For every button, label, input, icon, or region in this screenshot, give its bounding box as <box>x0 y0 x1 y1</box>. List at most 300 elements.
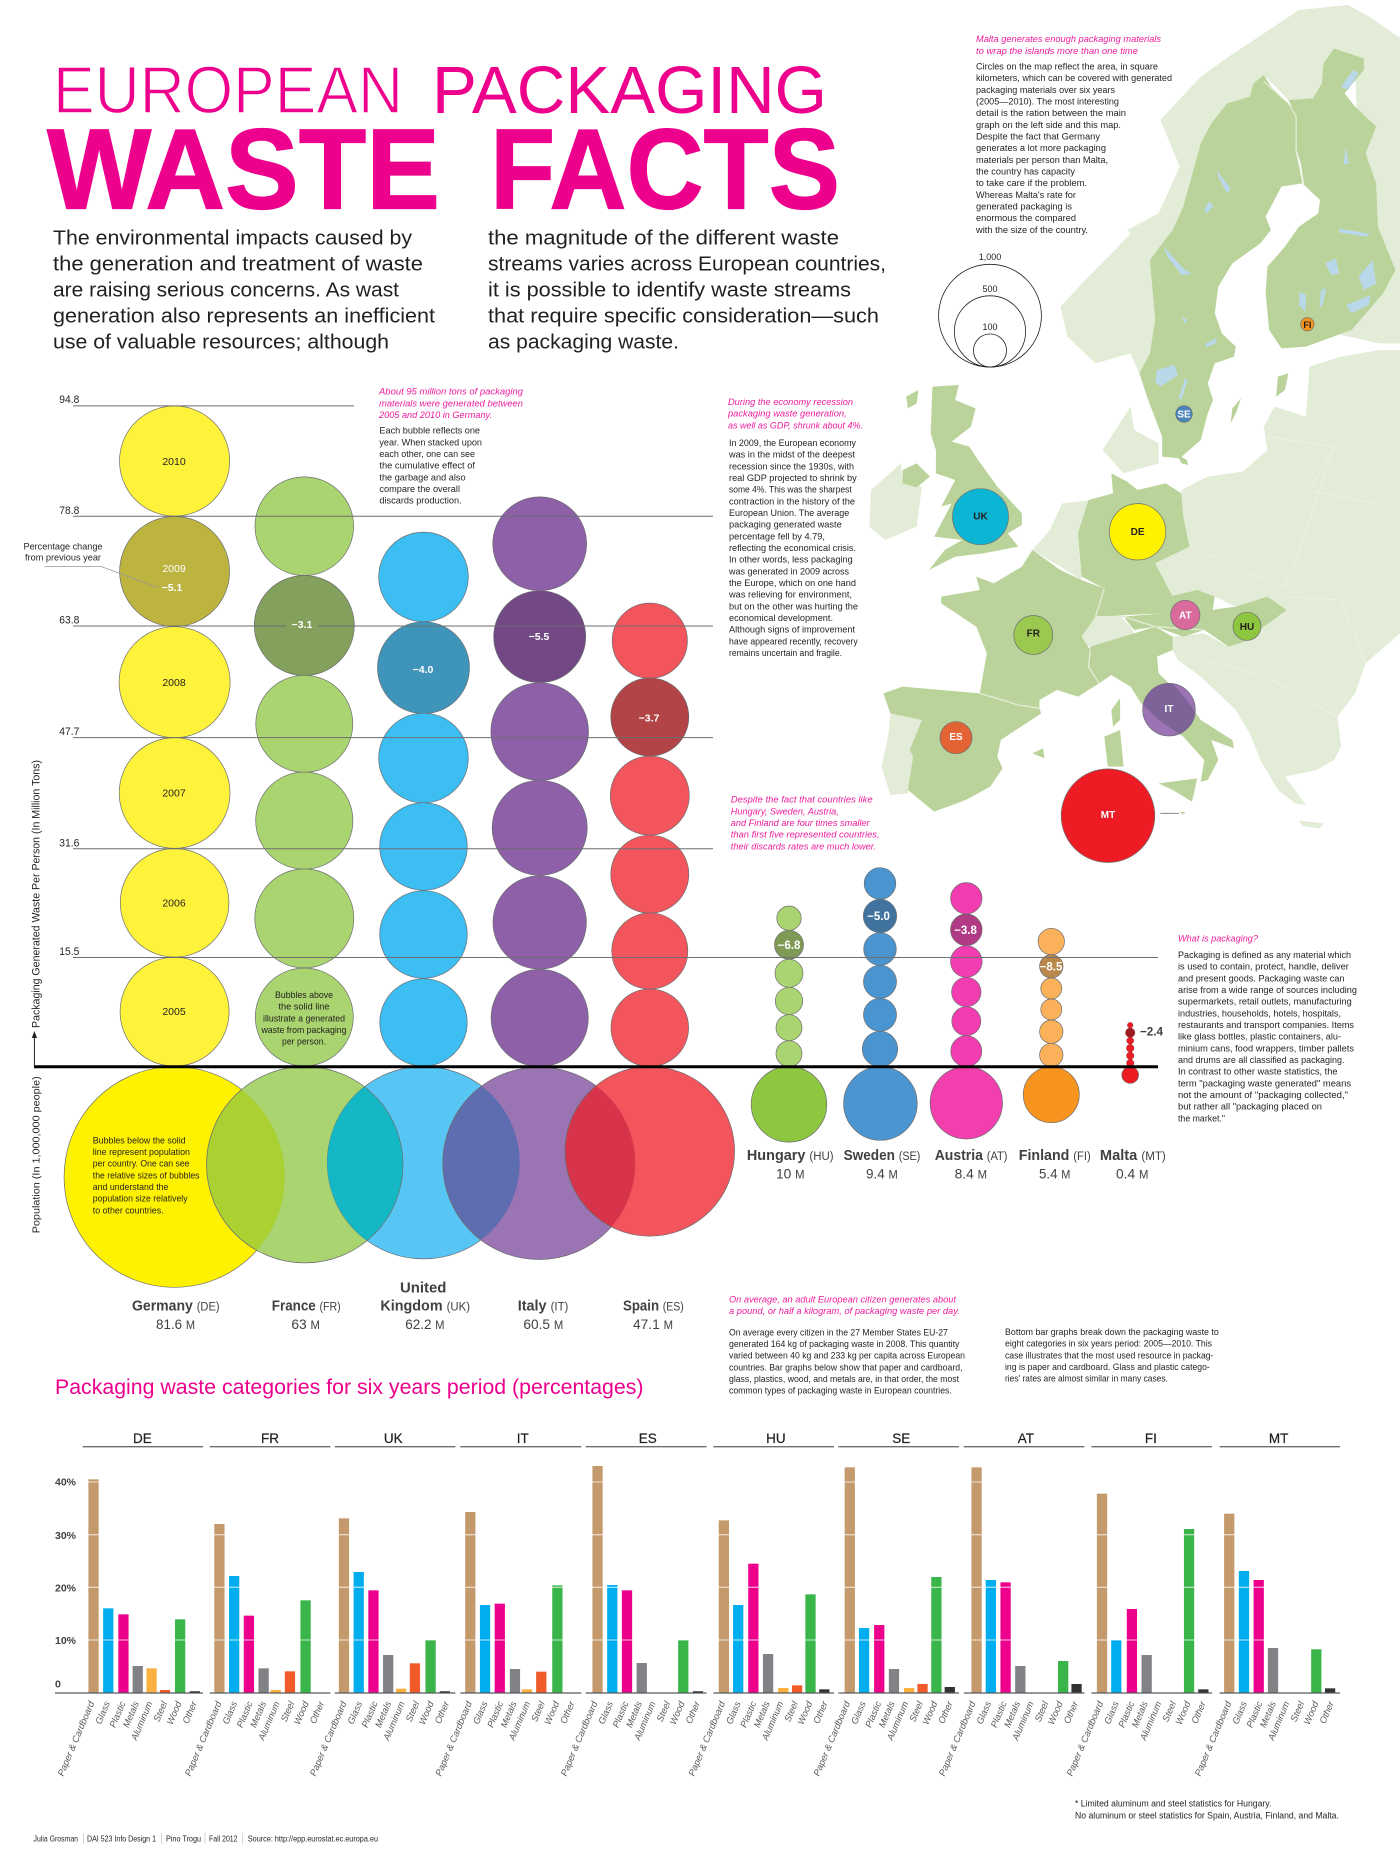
category labels: FI: Glass <box>1102 1700 1121 1726</box>
category labels: FI <box>1065 1699 1208 1778</box>
note: bubbles below line: Bubbles below the solid <box>93 1135 186 1146</box>
category labels: HU: Paper & Cardboard <box>687 1699 727 1778</box>
category labels: UK: Steel <box>404 1699 422 1723</box>
note: bubbles below line: to other countries. <box>93 1205 164 1216</box>
category labels: ES <box>559 1699 702 1778</box>
category labels: HU: Aluminum <box>760 1700 785 1743</box>
category labels: FR: Glass <box>221 1700 239 1726</box>
category labels: IT: Other <box>558 1699 577 1725</box>
callout: what is packaging: and drums are all classified as packaging. <box>1178 1055 1344 1066</box>
bubbles: Finland waste per year <box>1038 928 1065 1067</box>
callout: Malta: graph on the left side and this map. <box>976 120 1121 131</box>
callout: smaller countries: their discards rates are much lower. <box>731 841 876 852</box>
category labels: UK: Aluminum <box>381 1700 407 1743</box>
intro text: column 2: as packaging waste. <box>488 330 679 353</box>
callout: what is packaging: industries, households, hotels, hospitals, <box>1178 1008 1341 1019</box>
country labels: large: Italy (IT) <box>518 1299 569 1315</box>
category labels: UK: Glass <box>346 1700 364 1726</box>
year labels: Germany: 2008 <box>162 677 186 689</box>
category labels: HU: Plastic <box>738 1700 758 1729</box>
callout: Malta: kilometers, which can be covered with generated <box>976 73 1172 84</box>
callout: what is packaging: not the amount of "packaging collected," <box>1178 1090 1348 1101</box>
scale tick labels <box>59 394 79 958</box>
change labels: small countries <box>778 911 1163 1039</box>
text: bottom bar graphs explanation: ries' rates are almost similar in many cases. <box>1005 1374 1168 1385</box>
text: bottom bar graphs explanation <box>1005 1327 1219 1385</box>
callout: Malta: generated packaging is <box>976 202 1072 212</box>
country labels: large: 81.6 M <box>156 1316 195 1332</box>
callout: Malta: the country has capacity <box>976 166 1075 178</box>
country labels: small: 9.4 M <box>866 1165 898 1181</box>
note: bubbles below line: per country. One can see <box>93 1159 190 1170</box>
category labels: AT: Other <box>1062 1699 1080 1725</box>
category labels: MT: Metals <box>1258 1700 1278 1729</box>
callout: Germany 95 million: About 95 million tons of packaging <box>378 387 524 398</box>
title: FACTS <box>490 106 840 234</box>
callout: adult European citizen: varied between 40 kg and 233 kg per capita across European <box>729 1351 965 1362</box>
footnote <box>1075 1799 1339 1821</box>
callout: Malta: Circles on the map reflect the area, in square <box>976 62 1158 72</box>
category labels: SE: Wood <box>921 1699 940 1726</box>
callout: adult European citizen: generated 164 kg of packaging waste in 2008. This quantity <box>729 1339 960 1350</box>
map circle: ES: ES <box>949 732 963 743</box>
callout: Germany 95 million <box>378 387 524 507</box>
country labels: small: 5.4 M <box>1039 1165 1070 1181</box>
bar chart axis labels: 10% <box>55 1635 77 1647</box>
callout: recession: packaging waste generation, <box>727 409 847 420</box>
bar chart axis labels: 40% <box>55 1477 77 1489</box>
map circle: SE <box>1176 406 1192 422</box>
country column headers: UK <box>384 1431 403 1446</box>
note: bubbles below line <box>93 1135 200 1216</box>
category labels: AT: Glass <box>975 1700 993 1726</box>
country labels: large <box>132 1280 684 1332</box>
category labels: AT: Wood <box>1046 1699 1065 1726</box>
y axis label: waste: Packaging Generated Waste Per Person (In Million Tons) <box>30 760 42 1028</box>
category labels: FR: Wood <box>292 1699 311 1726</box>
year labels: Germany: 2005 <box>162 1006 186 1018</box>
bubbles: Malta waste per year <box>1126 1022 1135 1067</box>
category labels: ES: Other <box>684 1699 702 1725</box>
note: bubbles above line: the solid line <box>278 1002 330 1012</box>
callout: adult European citizen: a pound, or half a kilogram, of packaging waste per day. <box>729 1306 960 1317</box>
category labels: FI: Steel <box>1161 1699 1178 1723</box>
change labels: small countries: −2.4 <box>1140 1025 1163 1039</box>
change labels: large countries: −3.1 <box>292 619 313 631</box>
category labels: SE: Plastic <box>863 1700 883 1729</box>
category labels: AT: Paper & Cardboard <box>937 1699 978 1778</box>
country labels: small: 8.4 M <box>955 1165 987 1181</box>
category labels: HU: Glass <box>724 1700 743 1726</box>
callout: Malta: Whereas Malta's rate for <box>976 190 1077 201</box>
heading: bar charts: Packaging waste categories for six years period (percentages) <box>55 1376 644 1399</box>
bubbles: France waste per year <box>254 477 354 1066</box>
country labels: small: Malta (MT) <box>1100 1148 1166 1164</box>
solid baseline <box>34 1065 1158 1068</box>
callout: recession: as well as GDP, shrunk about 4%. <box>728 420 863 431</box>
y axis label: population: Population (In 1,000,000 people) <box>32 1076 42 1233</box>
callout: Malta: with the size of the country. <box>975 225 1088 236</box>
callout: Malta: to wrap the islands more than one time <box>976 46 1138 57</box>
country labels: small: Hungary (HU) <box>747 1148 834 1164</box>
callout: Germany 95 million: each other, one can see <box>379 449 475 460</box>
callout: Malta: enormous the compared <box>976 213 1076 224</box>
text: bottom bar graphs explanation: eight categories in six years period: 2005—2010. This <box>1005 1339 1212 1350</box>
category labels: DE: Glass <box>93 1700 112 1726</box>
bar chart axis labels: 30% <box>55 1530 77 1542</box>
category labels: MT: Paper & Cardboard <box>1193 1699 1234 1778</box>
country labels: large: 60.5 M <box>523 1316 563 1332</box>
bar chart: IT <box>465 1512 563 1693</box>
country labels: large: Kingdom (UK) <box>380 1299 470 1315</box>
category labels: IT: Metals <box>499 1700 519 1729</box>
callout: what is packaging: and present goods. Packaging waste can <box>1178 973 1344 984</box>
bubbles: UK waste per year <box>378 532 470 1066</box>
category labels: SE: Glass <box>849 1700 868 1726</box>
callout: adult European citizen: common types of packaging waste in European countries. <box>729 1386 952 1397</box>
category labels: DE: Metals <box>121 1700 141 1729</box>
map circle: DE <box>1109 504 1166 560</box>
title <box>47 53 840 234</box>
category labels: DE <box>56 1699 199 1778</box>
category labels: MT <box>1193 1699 1336 1778</box>
country column headers <box>83 1431 1340 1447</box>
country column headers: FI <box>1145 1431 1157 1446</box>
category labels: MT: Aluminum <box>1266 1700 1292 1743</box>
callout: what is packaging: arise from a wide range of sources including <box>1178 985 1357 996</box>
size legend circles <box>939 252 1041 367</box>
callout: smaller countries: Despite the fact that countries like <box>731 795 873 806</box>
callout: what is packaging <box>1178 934 1357 1124</box>
callout: what is packaging: term "packaging waste generated" means <box>1178 1078 1351 1089</box>
note: bubbles below line: population size relatively <box>93 1194 188 1205</box>
map circle: UK: UK <box>973 512 988 522</box>
footer credits: Julia Grosman <box>34 1834 78 1844</box>
callout: recession <box>727 397 863 659</box>
callout: recession: In 2009, the European economy <box>729 438 856 449</box>
country labels: small: 10 M <box>776 1165 805 1181</box>
intro text: column 2: it is possible to identify waste streams <box>488 278 851 301</box>
callout: Malta: to take care if the problem. <box>976 178 1087 189</box>
intro text: column 1 <box>53 226 435 353</box>
category labels: DE: Plastic <box>108 1700 128 1729</box>
category labels: IT <box>434 1699 577 1778</box>
callout: adult European citizen <box>729 1294 965 1397</box>
category labels: ES: Metals <box>624 1700 644 1729</box>
country labels: large: 63 M <box>291 1316 320 1332</box>
callout: what is packaging: minium cans, food wrappers, timber pallets <box>1178 1043 1354 1054</box>
map circle: IT: IT <box>1165 704 1173 715</box>
intro text: column 1: use of valuable resources; although <box>53 330 389 353</box>
callout: recession: In other words, less packaging <box>729 555 853 566</box>
category labels: UK: Plastic <box>360 1700 380 1729</box>
category labels: DE: Paper & Cardboard <box>56 1699 97 1778</box>
footer credits: Source: http://epp.eurostat.ec.europa.eu <box>248 1834 378 1844</box>
category labels: AT <box>937 1699 1080 1778</box>
category labels: FI: Other <box>1190 1699 1208 1725</box>
category labels: SE: Aluminum <box>885 1700 910 1743</box>
note: bubbles below line: line represent population <box>93 1147 190 1158</box>
text: bottom bar graphs explanation: Bottom bar graphs break down the packaging waste to <box>1005 1327 1219 1338</box>
category labels: ES: Aluminum <box>632 1700 658 1743</box>
intro text: column 2: streams varies across European countries, <box>488 252 886 275</box>
change labels: small countries: −3.8 <box>954 925 977 937</box>
bubbles: Germany waste per year <box>119 406 230 1066</box>
callout: Malta: Despite the fact that Germany <box>976 132 1100 142</box>
callout: recession: was in the midst of the deepest <box>728 450 855 461</box>
country labels: small: Sweden (SE) <box>844 1148 920 1164</box>
change labels: small countries: −8.5 <box>1040 962 1063 974</box>
note: percentage change: from previous year <box>25 552 101 562</box>
bar chart axis labels: 0 <box>55 1679 61 1691</box>
callout: what is packaging: What is packaging? <box>1178 934 1259 945</box>
category labels: SE: Other <box>936 1699 955 1725</box>
country labels: small: 0.4 M <box>1116 1165 1148 1181</box>
year labels: Germany: 2010 <box>162 456 186 468</box>
change labels: large countries <box>292 619 660 724</box>
text: bottom bar graphs explanation: ing is paper and cardboard. Glass and plastic catego- <box>1005 1362 1210 1373</box>
category labels: SE <box>812 1699 955 1778</box>
note: bubbles below line: and understand the <box>93 1182 168 1193</box>
footnote: * Limited aluminum and steel statistics for Hungary. <box>1075 1799 1271 1810</box>
callout: Germany 95 million: Each bubble reflects one <box>379 426 480 437</box>
footer credits: Pino Trogu <box>166 1834 201 1844</box>
category labels: IT: Aluminum <box>506 1700 532 1743</box>
bar chart: UK <box>339 1518 450 1693</box>
bubbles: Hungary waste per year <box>774 906 804 1067</box>
bar chart: FI <box>1097 1494 1208 1693</box>
year labels: Germany: 2007 <box>162 788 186 800</box>
category labels: FI: Metals <box>1130 1700 1150 1729</box>
note: bubbles above line: waste from packaging <box>261 1025 346 1035</box>
note: bubbles above line: per person. <box>282 1036 326 1046</box>
callout: recession: During the economy recession <box>728 397 853 408</box>
bar chart: HU <box>719 1520 829 1693</box>
callout: Germany 95 million: the cumulative effect of <box>379 461 475 472</box>
callout: recession: economical development. <box>729 613 833 624</box>
callout: Germany 95 million: the garbage and also <box>379 472 466 483</box>
category labels: IT: Glass <box>471 1700 490 1726</box>
callout: recession: Although signs of improvement <box>729 625 855 636</box>
bar chart axis labels: 20% <box>55 1583 77 1595</box>
change labels: large countries: −5.5 <box>529 631 550 643</box>
country labels: large: 62.2 M <box>405 1316 444 1332</box>
size legend circles: 1,000 <box>979 252 1001 262</box>
callout: smaller countries: Hungary, Sweden, Austria, <box>731 806 839 817</box>
size legend circles: 100 <box>982 322 998 332</box>
callout: adult European citizen: On average every citizen in the 27 Member States EU-27 <box>729 1327 948 1338</box>
map circle: FI <box>1301 318 1314 331</box>
intro text: column 1: are raising serious concerns. As wast <box>53 278 399 301</box>
map circle: HU <box>1233 612 1261 640</box>
country labels: large: Germany (DE) <box>132 1299 220 1315</box>
category labels: UK: Wood <box>417 1699 436 1726</box>
callout: what is packaging: In contrast to other waste statistics, the <box>1178 1067 1338 1078</box>
scale tick labels: 15.5 <box>59 946 79 958</box>
population bubbles: large countries <box>64 1066 735 1287</box>
category labels: FI: Aluminum <box>1138 1700 1164 1743</box>
category labels: MT: Other <box>1318 1699 1336 1725</box>
scale tick labels: 63.8 <box>59 614 79 626</box>
map circle: FI: FI <box>1303 320 1311 330</box>
category labels: ES: Glass <box>597 1700 615 1726</box>
size legend circles: 500 <box>982 284 998 294</box>
scale tick labels: 94.8 <box>59 394 79 406</box>
country column headers: MT <box>1269 1431 1288 1446</box>
callout: recession: have appeared recently, recovery <box>729 636 858 647</box>
year labels: Germany: 2006 <box>162 898 186 910</box>
category labels: FI: Paper & Cardboard <box>1065 1699 1106 1778</box>
intro text: column 1: generation also represents an inefficient <box>53 304 435 327</box>
country labels: small <box>747 1148 1166 1181</box>
map circle: AT: AT <box>1179 610 1192 622</box>
category labels: DE: Steel <box>152 1699 170 1723</box>
category labels: FR: Plastic <box>235 1700 255 1729</box>
callout: recession: reflecting the economical crisis. <box>729 543 856 554</box>
category labels: SE: Metals <box>877 1700 897 1729</box>
category labels: HU: Steel <box>782 1699 800 1723</box>
category labels: FR: Steel <box>279 1699 297 1723</box>
map circle: ES <box>940 722 972 754</box>
callout: Malta: generates a lot more packaging <box>976 143 1106 154</box>
category labels: SE: Paper & Cardboard <box>812 1699 852 1778</box>
country labels: large: 47.1 M <box>633 1316 673 1332</box>
callout: recession: contraction in the history of the <box>729 496 855 507</box>
title: WASTE <box>47 106 440 234</box>
category labels: HU: Metals <box>752 1700 772 1729</box>
callout: what is packaging: Packaging is defined as any material which <box>1178 950 1351 961</box>
callout: recession: European Union. The average <box>729 508 849 519</box>
callout: recession: real GDP projected to shrink by <box>729 473 857 484</box>
country column headers: SE <box>892 1431 910 1446</box>
callout: Germany 95 million: 2005 and 2010 in Germany. <box>378 410 492 421</box>
category labels: FR: Other <box>308 1699 326 1725</box>
category labels: FR: Aluminum <box>256 1700 282 1743</box>
callout: smaller countries: than first five represented countries, <box>731 830 880 841</box>
country column headers: HU <box>766 1431 786 1446</box>
country column headers: FR <box>261 1431 279 1446</box>
map circle: DE: DE <box>1131 527 1145 538</box>
bar chart: SE <box>845 1467 955 1693</box>
callout: Germany 95 million: year. When stacked upon <box>379 437 482 448</box>
category labels: AT: Aluminum <box>1010 1700 1036 1743</box>
callout: what is packaging: is used to contain, protect, handle, deliver <box>1178 962 1350 973</box>
country labels: large: Spain (ES) <box>623 1299 684 1315</box>
category labels: IT: Wood <box>543 1699 562 1726</box>
callout: what is packaging: like glass bottles, plastic containers, alu- <box>1178 1032 1341 1043</box>
intro text: column 1: The environmental impacts caused by <box>53 226 413 249</box>
bar chart axis labels <box>55 1477 77 1691</box>
map circle: FR <box>1014 616 1053 654</box>
year labels: Germany: 2009 <box>162 563 186 575</box>
category labels: UK: Metals <box>373 1700 393 1729</box>
category labels: FR: Metals <box>248 1700 268 1729</box>
callout: smaller countries: and Finland are four times smaller <box>731 818 870 829</box>
category labels: AT: Plastic <box>989 1700 1009 1729</box>
callout: Germany 95 million: compare the overall <box>379 484 460 495</box>
bar chart: FR <box>214 1524 311 1693</box>
callout: what is packaging: restaurants and transport companies. Items <box>1178 1020 1354 1031</box>
note: bubbles above line: illustrate a generated <box>263 1014 345 1024</box>
callout: recession: some 4%. This was the sharpest <box>729 485 852 496</box>
footer credits: DAI 523 Info Design 1 <box>87 1834 156 1844</box>
map circle: FR: FR <box>1027 628 1041 640</box>
map circle: MT: MT <box>1101 810 1115 821</box>
intro text: column 2: the magnitude of the different waste <box>488 226 839 249</box>
category labels: IT: Plastic <box>485 1700 505 1729</box>
intro text: column 1: the generation and treatment of waste <box>53 252 423 275</box>
category labels: FI: Plastic <box>1117 1700 1137 1729</box>
callout: smaller countries <box>731 795 880 852</box>
map: central and southern Europe <box>869 350 1400 828</box>
country column headers: IT <box>517 1431 529 1446</box>
callout: recession: recession since the 1930s, with <box>729 461 854 472</box>
category labels: ES: Plastic <box>611 1700 631 1729</box>
intro text: column 2 <box>488 226 886 353</box>
axis arrow <box>32 1031 37 1066</box>
category labels: HU <box>687 1699 830 1778</box>
callout: recession: was generated in 2009 across <box>728 566 849 577</box>
category labels: IT: Paper & Cardboard <box>434 1699 474 1778</box>
callout: adult European citizen: countries. Bar graphs below show that paper and cardboard, <box>729 1362 962 1373</box>
category labels: FI: Wood <box>1174 1699 1193 1726</box>
callout: what is packaging: supermarkets, retail outlets, manufacturing <box>1178 997 1352 1008</box>
category labels: MT: Glass <box>1230 1700 1249 1726</box>
country column headers: ES <box>639 1431 657 1446</box>
map of Europe <box>869 5 1400 863</box>
category labels: MT: Plastic <box>1245 1700 1265 1729</box>
callout: adult European citizen: On average, an adult European citizen generates about <box>729 1294 956 1305</box>
note: percentage change: Percentage change <box>24 542 102 552</box>
country labels: small: Finland (FI) <box>1019 1148 1091 1164</box>
country column headers: DE <box>133 1431 152 1446</box>
category labels: FR: Paper & Cardboard <box>183 1699 224 1778</box>
country labels: small: Austria (AT) <box>935 1148 1008 1164</box>
text: bottom bar graphs explanation: case illustrates that the most used resource in packag- <box>1005 1350 1213 1361</box>
population bubbles: small countries <box>751 1066 1139 1142</box>
category labels: UK <box>308 1699 451 1778</box>
callout: recession: remains uncertain and fragile. <box>729 648 842 659</box>
category labels: HU: Wood <box>796 1699 815 1726</box>
note: bubbles below line: the relative sizes of bubbles <box>93 1170 200 1181</box>
intro text: column 2: that require specific consideration—such <box>488 304 879 327</box>
callout: Malta: detail is the ration between the main <box>976 108 1126 119</box>
horizontal scale lines <box>73 406 1158 957</box>
category labels: HU: Other <box>811 1699 830 1725</box>
bubbles: Spain waste per year <box>610 603 689 1067</box>
bar chart: ES <box>592 1466 703 1693</box>
country labels: large: United <box>400 1280 446 1296</box>
category labels: MT: Wood <box>1302 1699 1321 1726</box>
note: bubbles above line: Bubbles above <box>275 990 333 1000</box>
category labels: DE: Other <box>181 1699 199 1725</box>
footer credits: Fall 2012 <box>209 1834 238 1844</box>
category labels: AT: Metals <box>1002 1700 1022 1729</box>
footnote: No aluminum or steel statistics for Spain, Austria, Finland, and Malta. <box>1075 1810 1339 1821</box>
note: bubbles above line <box>261 990 346 1046</box>
callout: Malta: (2005—2010). The most interesting <box>976 96 1119 108</box>
callout: adult European citizen: glass, plastics, wood, and metals are, in that order, the most <box>729 1374 959 1385</box>
note: percentage change <box>24 542 158 588</box>
map circle: MT <box>1061 769 1155 862</box>
change labels: small countries: −6.8 <box>778 940 801 952</box>
callout: recession: was relieving for environment, <box>728 590 852 601</box>
category labels: AT: Steel <box>1033 1699 1051 1723</box>
bubbles: Austria waste per year <box>950 883 982 1067</box>
bubbles: Italy waste per year <box>491 497 588 1067</box>
map: northern Europe <box>1060 5 1400 458</box>
footer credits <box>34 1833 378 1844</box>
